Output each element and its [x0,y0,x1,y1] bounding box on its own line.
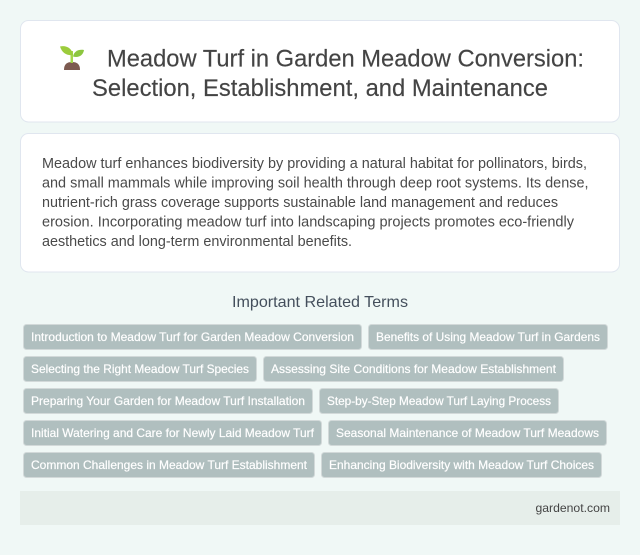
panel: related term tags [24,324,608,478]
text block: description: aesthetics and long-term environmental benefits. [42,234,352,250]
title: Meadow Turf in Garden Meadow Conversion: [107,46,584,72]
text block: description [42,156,588,250]
heading: important related terms: Important Related Terms [232,294,408,311]
tag: Preparing Your Garden for Meadow Turf Installation [31,394,305,408]
tag: Seasonal Maintenance of Meadow Turf Meadows [336,426,599,440]
tag [320,388,558,414]
tag: Introduction to Meadow Turf for Garden Meadow Conversion [31,330,354,344]
text block: description: and small mammals while improving soil health through deep root systems. Its dense, [42,176,588,192]
panel: title card [20,20,620,122]
tag [368,324,608,350]
tag: Selecting the Right Meadow Turf Species [31,362,249,376]
footer text: source: gardenot.com [536,501,610,515]
footer [20,491,620,525]
text block: description: erosion. Incorporating meadow turf into landscaping projects promotes eco-friendly [42,214,575,230]
tag [328,420,606,446]
tag: Assessing Site Conditions for Meadow Establishment [271,362,557,376]
panel: description card [20,134,620,272]
tag: Common Challenges in Meadow Turf Establishment [31,458,308,472]
tag [264,356,564,382]
text block: description: Meadow turf enhances biodiversity by providing a natural habitat for pollinators, birds, [42,156,587,172]
tag: Enhancing Biodiversity with Meadow Turf Choices [329,458,594,472]
tag [322,452,602,478]
tag [24,388,312,414]
title [92,46,584,102]
tag [24,356,256,382]
tag [24,452,314,478]
text block: description: nutrient-rich grass coverage supports sustainable land management and reduces [42,195,558,211]
tag: Step-by-Step Meadow Turf Laying Process [327,394,551,408]
icon: seedling [60,46,84,70]
tag [24,420,322,446]
tag [24,324,362,350]
tag: Initial Watering and Care for Newly Laid Meadow Turf [31,426,315,440]
title: Selection, Establishment, and Maintenance [92,75,548,102]
tag: Benefits of Using Meadow Turf in Gardens [376,330,600,344]
